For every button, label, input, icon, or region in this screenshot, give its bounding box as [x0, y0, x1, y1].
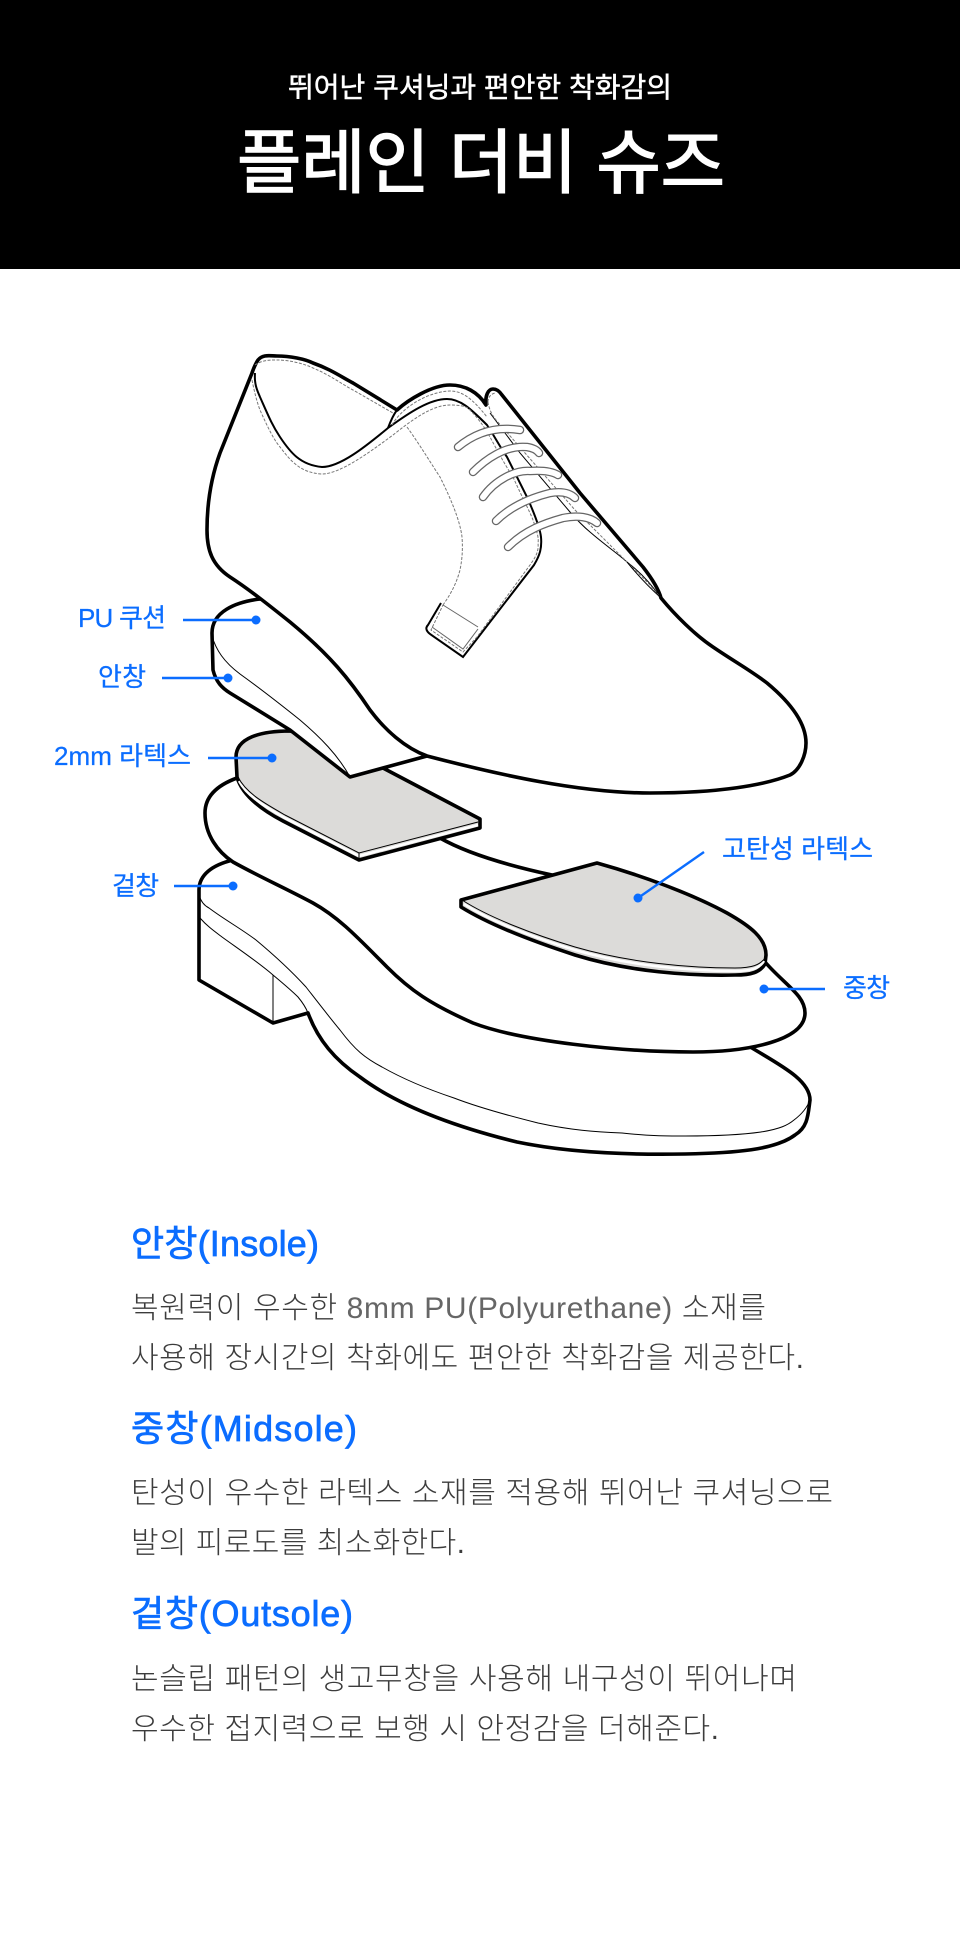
- section: insole description: 안창(Insole): [131, 1223, 319, 1264]
- callout: high-elastic latex: 고탄성 라텍스: [722, 834, 873, 864]
- section: outsole description: [131, 1593, 797, 1746]
- forefoot high-elastic latex pad: [461, 863, 766, 975]
- callout: PU cushion: [78, 603, 260, 633]
- callout: 2mm latex: 2mm 라텍스: [54, 741, 191, 771]
- callout: 2mm latex: [54, 741, 276, 771]
- outsole layer: [199, 860, 810, 1154]
- section: outsole description: 논슬립 패턴의 생고무창을 사용해 내구성이 뛰어나며: [131, 1663, 797, 1696]
- section: midsole description: 탄성이 우수한 라텍스 소재를 적용해 뛰어난 쿠셔닝으로: [131, 1477, 833, 1510]
- heel latex pad: [236, 731, 480, 860]
- callout: outsole: 겉창: [112, 871, 159, 901]
- callout: midsole: [760, 973, 890, 1003]
- callout: insole: 안창: [98, 662, 146, 692]
- midsole layer: [205, 778, 805, 1052]
- callout: insole: [98, 662, 232, 692]
- shoe upper: [207, 356, 806, 793]
- section: midsole description: 중창(Midsole): [131, 1408, 357, 1449]
- exploded shoe illustration: [199, 356, 810, 1154]
- collar and eyestay outline: [255, 373, 541, 657]
- section: insole description: 사용해 장시간의 착화에도 편안한 착화감을 제공한다.: [131, 1342, 804, 1375]
- callout: high-elastic latex: [634, 834, 873, 902]
- insole layer: [212, 599, 427, 777]
- section: outsole description: 겉창(Outsole): [131, 1593, 353, 1634]
- header subtitle: 뛰어난 쿠셔닝과 편안한 착화감의: [288, 72, 672, 103]
- section: outsole description: 우수한 접지력으로 보행 시 안정감을 더해준다.: [131, 1713, 719, 1746]
- section: midsole description: [131, 1408, 833, 1560]
- header banner: [0, 0, 960, 269]
- section: midsole description: 발의 피로도를 최소화한다.: [131, 1527, 465, 1560]
- section: insole description: [131, 1223, 804, 1375]
- callout: PU cushion: PU 쿠션: [78, 603, 166, 633]
- tongue and throat lines: [490, 413, 660, 597]
- section: insole description: 복원력이 우수한 8mm PU(Polyurethane) 소재를: [131, 1292, 766, 1325]
- stitching lines: [252, 380, 538, 652]
- shoe laces: [458, 429, 597, 547]
- callout: outsole: [112, 871, 238, 901]
- callout: midsole: 중창: [843, 973, 890, 1003]
- main title: 플레인 더비 슈즈: [237, 124, 725, 202]
